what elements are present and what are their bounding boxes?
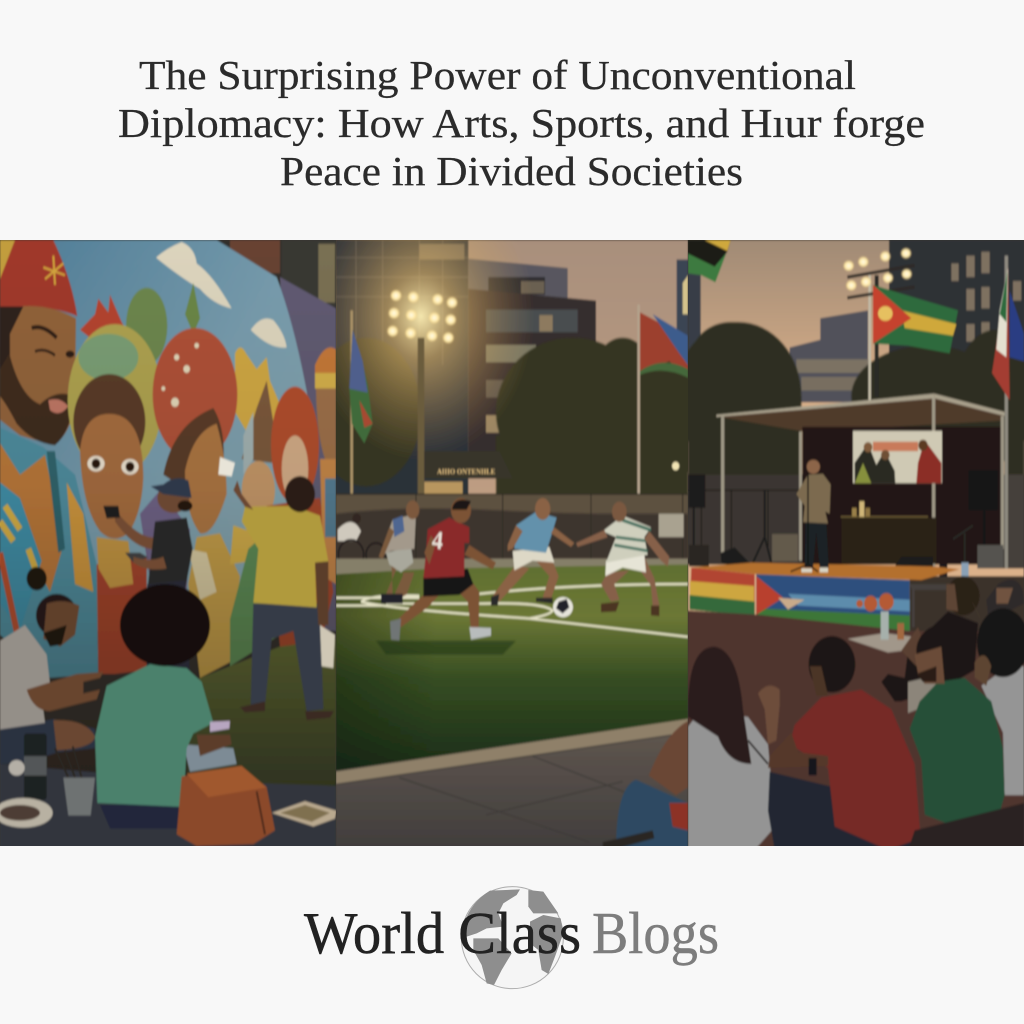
evening shade over mural [0, 240, 336, 787]
path edge [336, 559, 688, 574]
right flag [992, 256, 1024, 568]
mural: woman with red turban [140, 328, 240, 678]
panel: arts mural scene [0, 240, 337, 850]
office building [468, 259, 596, 459]
player 4, red shirt [390, 498, 496, 641]
buildings behind the mural [230, 240, 336, 306]
player shadows on grass [376, 641, 516, 654]
seated woman's arm and jeans from right panel [603, 721, 688, 850]
logo: World Class Blogs [304, 887, 719, 989]
top-left flag [688, 240, 731, 282]
player 1, grey shirt [379, 500, 419, 604]
seated man with bun [0, 567, 103, 764]
player 4, red shirt: 4 [431, 527, 444, 556]
floodlight pole and lamps [386, 289, 458, 506]
audience: man in white shirt [975, 608, 1024, 795]
stage backdrop [802, 427, 1002, 565]
pavement [0, 764, 336, 850]
projection screen [853, 431, 942, 483]
storefront with sign [423, 451, 498, 496]
wordmark accent: Blogs [592, 900, 719, 966]
spectators and fence [336, 494, 688, 570]
woman in cap painting [103, 478, 193, 678]
mural sky [0, 240, 308, 593]
audience: woman from behind [688, 647, 780, 850]
table with bottles [841, 501, 936, 564]
stage roof [716, 394, 1005, 432]
mural: girl with golden halo [68, 324, 162, 674]
sign pole at left [688, 271, 701, 365]
audience: man in green shirt [910, 624, 1005, 826]
left flag [349, 310, 373, 498]
right flag [637, 305, 688, 516]
icon: globe [461, 887, 563, 989]
trees [311, 338, 699, 498]
stage posts [721, 398, 1004, 566]
tall sign at right [677, 260, 688, 338]
grass [187, 639, 336, 786]
tree trunk, fence and background [688, 475, 1024, 568]
mural: man with red hat [0, 240, 98, 678]
player 2, blue shirt [491, 498, 574, 606]
mural clouds [156, 242, 287, 348]
field markings [336, 584, 688, 637]
storefront with sign: AIIIO ONTENIILE [437, 467, 495, 476]
wordmark: World Class [304, 900, 581, 966]
soccer ball [553, 597, 573, 617]
floodlight glow [336, 240, 528, 453]
brown backpack [177, 766, 275, 846]
title [118, 52, 925, 194]
panel: stand-up comedy stage scene [675, 240, 1024, 850]
title: The Surprising Power of Unconventional [139, 52, 856, 98]
panel: football match scene [336, 240, 688, 846]
stage floor [691, 563, 960, 580]
art supplies [0, 733, 337, 828]
stage right area behind audience [910, 576, 1024, 639]
football field [336, 565, 688, 771]
dark tower [889, 240, 1024, 369]
floodlights [843, 247, 915, 400]
stage banners [690, 568, 910, 631]
paving seams [336, 733, 688, 842]
grey building [790, 310, 870, 402]
pavement [336, 719, 688, 850]
woman with afro, green shirt [95, 584, 237, 828]
curb [336, 719, 688, 784]
glass tower [336, 240, 468, 494]
mural: bearded figure with white cap [230, 381, 280, 666]
image strip backing [0, 240, 1024, 846]
audience: right group in the back [881, 576, 1024, 713]
title: Diplomacy: How Arts, Sports, and Hıur forge [118, 100, 925, 146]
mural: figure in orange cap [315, 348, 336, 584]
trees [675, 322, 1024, 494]
low table with bottles [847, 584, 946, 653]
mural: figure in red hood [267, 387, 333, 647]
large tricolour flag [873, 285, 958, 353]
comedian at microphone [791, 460, 831, 572]
field side shade [336, 571, 416, 769]
mural: background shapes [80, 283, 280, 443]
man in yellow shirt painting [218, 457, 335, 720]
title: Peace in Divided Societies [280, 148, 743, 194]
player 3, striped shirt [576, 502, 669, 616]
lamp post [672, 462, 679, 470]
speakers and equipment [689, 471, 1003, 585]
bench [908, 803, 1024, 850]
audience: man in red shirt [768, 636, 921, 850]
purple side wall [280, 277, 336, 631]
brick plaza [688, 611, 1024, 850]
